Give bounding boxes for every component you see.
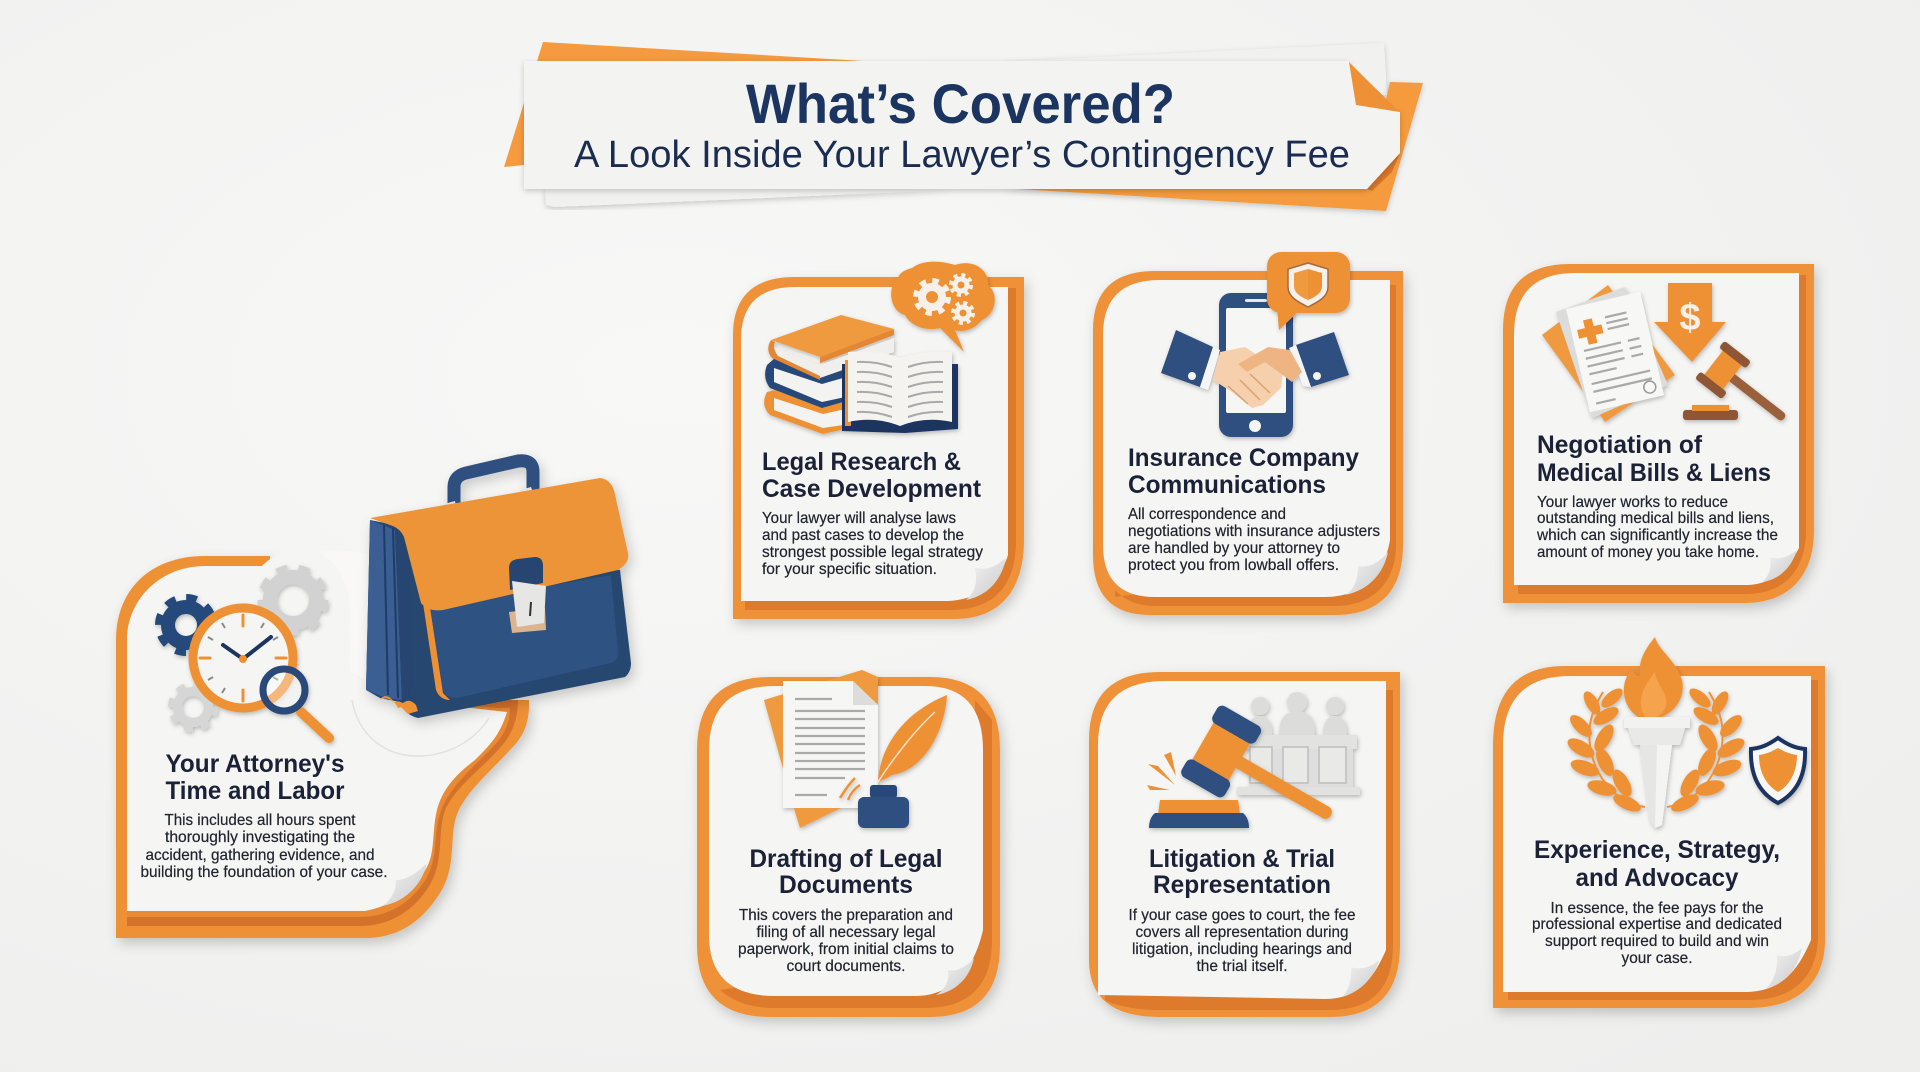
panel: insurance company communications [1093,252,1403,615]
panel: experience, strategy and advocacy [1493,637,1825,1008]
icon: quill and ink bottle [840,695,947,828]
icon: dollar down arrow: $ [1679,297,1701,339]
heading: Litigation & Trial [1149,845,1335,873]
heading: Insurance Company [1128,444,1359,472]
heading: Communications [1128,471,1326,499]
description: accident, gathering evidence, and [146,847,374,864]
description: support required to build and win [1545,933,1769,950]
heading: Experience, Strategy, [1534,836,1780,864]
icon: gears, clock and magnifier [159,568,329,738]
heading [1534,836,1780,892]
description: In essence, the fee pays for the [1550,900,1764,917]
heading: Documents [779,871,913,899]
icon: briefcase [366,461,631,718]
heading: Drafting of Legal [750,845,942,873]
heading: Your Attorney's [166,750,344,778]
description: covers all representation during [1136,924,1348,941]
description [762,510,983,578]
heading [1128,444,1359,499]
description: protect you from lowball offers. [1128,557,1339,574]
icon: shield bubble [1267,252,1350,330]
heading [750,845,942,899]
description [1532,900,1782,967]
icon: shield [1751,738,1805,803]
description: thoroughly investigating the [165,829,355,846]
description: are handled by your attorney to [1128,540,1340,557]
panel: litigation and trial representation [1089,672,1400,1017]
heading [1149,845,1335,899]
heading: Legal Research & [762,448,961,476]
description: for your specific situation. [762,561,937,578]
panel: drafting of legal documents [697,670,1000,1017]
icon: brain with gears [891,262,995,352]
title heading: What’s Covered? [746,72,1175,135]
description: Your lawyer works to reduce [1537,494,1728,511]
icon: torch with laurel [1565,637,1747,828]
heading: Negotiation of [1537,431,1703,459]
subtitle: A Look Inside Your Lawyer’s Contingency Fee [574,134,1350,176]
description: your case. [1622,950,1692,967]
panel: legal research and case development [733,262,1024,619]
description: professional expertise and dedicated [1532,916,1782,933]
icon: impact sparks [1147,752,1176,790]
description: court documents. [786,958,906,975]
description: This covers the preparation and [739,907,953,924]
description: and past cases to develop the [762,527,964,544]
description: filing of all necessary legal [756,924,936,941]
icon: court bench [1237,692,1360,795]
title banner [504,42,1423,211]
heading: Representation [1153,871,1331,899]
description: negotiations with insurance adjusters [1128,523,1380,540]
description [738,907,954,975]
description [1128,506,1380,574]
heading [1537,431,1771,487]
heading: Time and Labor [166,777,345,805]
panel: negotiation of medical bills and liens [1503,264,1814,603]
description: the trial itself. [1196,958,1288,975]
description: which can significantly increase the [1536,527,1778,544]
description: outstanding medical bills and liens, [1537,510,1774,527]
description: building the foundation of your case. [140,864,388,881]
description: This includes all hours spent [164,812,356,829]
heading: Medical Bills & Liens [1537,459,1771,487]
heading [166,750,345,805]
description: All correspondence and [1128,506,1286,523]
icon: navy gavel [1149,703,1352,851]
description [1536,494,1778,561]
description: paperwork, from initial claims to [738,941,954,958]
heading: Case Development [762,475,982,503]
description: Your lawyer will analyse laws [762,510,956,527]
icon: books [764,315,958,434]
icon: brown gavel [1683,341,1799,437]
icon: medical documents [1542,285,1675,422]
description: amount of money you take home. [1537,544,1759,561]
description: If your case goes to court, the fee [1128,907,1356,924]
description: litigation, including hearings and [1132,941,1352,958]
description [1128,907,1356,975]
description [140,812,388,881]
icon: phone with handshake [1161,293,1349,437]
heading: and Advocacy [1576,864,1739,892]
description: strongest possible legal strategy [762,544,983,561]
heading [762,448,982,503]
panel: your attorney's time and labor [116,549,529,938]
icon: document stack [764,670,878,828]
icon: dollar down arrow [1654,283,1726,362]
